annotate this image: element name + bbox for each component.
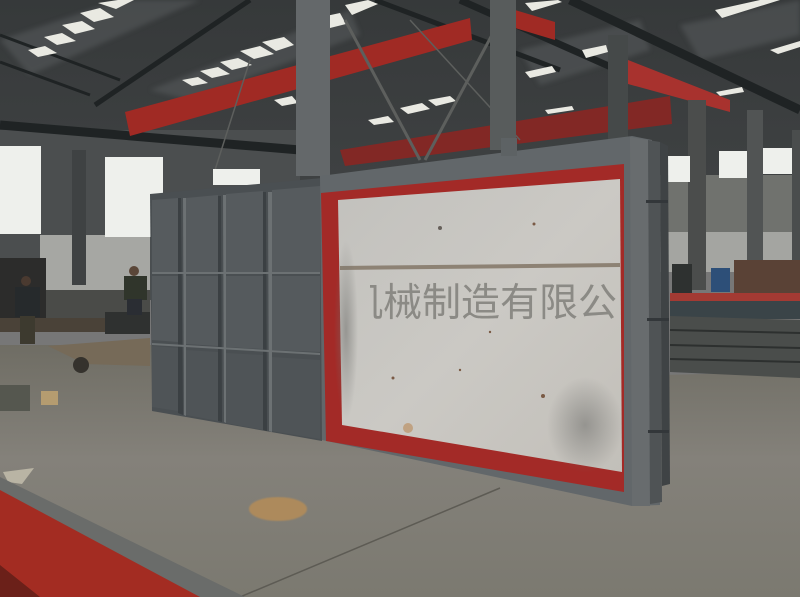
steel gate [150, 136, 670, 506]
right background: stacked steel and machinery [670, 260, 800, 378]
hoist cables [215, 20, 520, 170]
gate: weld seam [340, 263, 620, 270]
floor expansion joint [240, 488, 500, 597]
ceiling mesh bands [0, 0, 800, 100]
gate: front outer frame [320, 136, 660, 506]
gate: steel face plate [338, 179, 622, 472]
gate: rear ribbed panel [150, 178, 322, 441]
bright windows [0, 146, 792, 237]
left background equipment [0, 258, 150, 411]
foreground red steel beam [0, 477, 245, 597]
background: ceiling [0, 0, 800, 200]
workers [15, 266, 147, 344]
floor debris [3, 468, 34, 484]
ceiling skylights [28, 0, 800, 125]
factory floor [0, 345, 800, 597]
gate: right side ribs [630, 137, 670, 506]
background: far wall [0, 130, 800, 300]
gate: plate smudges and rust spots [334, 222, 623, 473]
ceiling truss lines [0, 0, 800, 150]
red overhead crane beams [125, 10, 730, 166]
watermark text: 机械制造有限公 [344, 272, 617, 328]
floor stain [249, 497, 307, 521]
factory columns [72, 0, 800, 290]
gate: red seal frame [321, 164, 624, 492]
gate: top lifting lug [501, 138, 517, 156]
